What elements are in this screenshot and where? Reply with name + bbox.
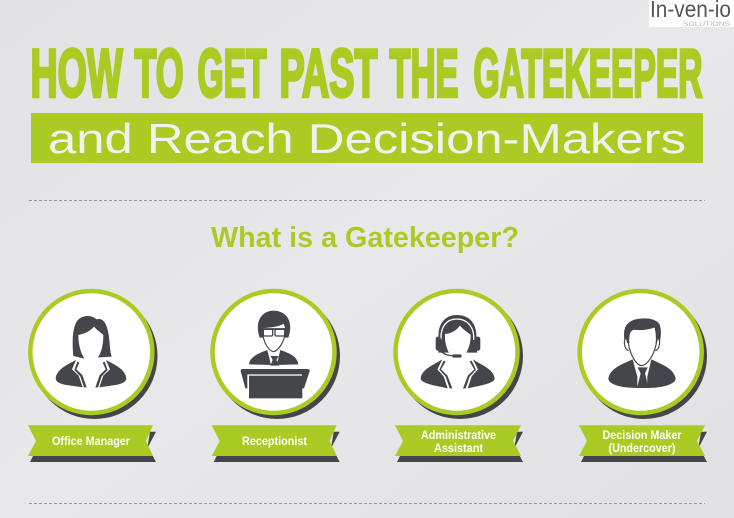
title [30,36,702,112]
panel: decision maker [579,291,707,462]
logo: In-ven-io Solutions: SOLUTIONS [683,21,731,28]
icon: decision maker badge [580,291,707,419]
icon: office manager badge [30,291,158,419]
title: PAST [280,36,378,112]
panel: administrative assistant [395,291,523,462]
ribbon: Administrative Assistant: Administrative [421,430,496,442]
ribbon: Office Manager: Office Manager [52,436,130,448]
ribbon: Receptionist [212,425,340,462]
icon: administrative assistant badge [396,291,523,419]
title: TO [134,36,184,112]
title: HOW [30,36,123,112]
icon: receptionist badge [212,291,340,419]
panel: receptionist [212,291,340,462]
ribbon: Receptionist: Receptionist [242,436,307,448]
ribbon: Decision Maker (Undercover): Decision Maker [602,430,682,442]
ribbon: Decision Maker (Undercover): (Undercover) [608,443,676,455]
title: THE [390,36,458,112]
heading: What is a Gatekeeper?: What is a Gatekeeper? [211,222,519,254]
ribbon: Decision Maker (Undercover) [579,425,707,462]
title: GET [198,36,266,112]
ribbon: Administrative Assistant: Assistant [434,443,483,455]
ribbon: Office Manager [28,425,156,462]
subtitle banner: and Reach Decision-Makers [48,115,686,162]
panel: office manager [28,291,158,462]
ribbon: Administrative Assistant [395,425,523,462]
